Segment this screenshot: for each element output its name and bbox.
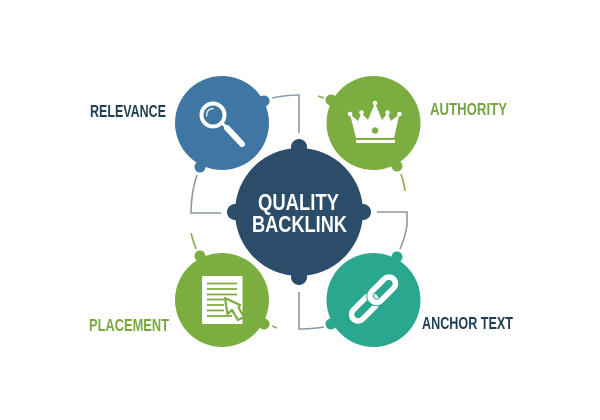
label: relevance: RELEVANCE [90, 101, 166, 121]
center title [252, 189, 347, 237]
label: anchor text: ANCHOR TEXT [422, 313, 513, 333]
node: anchor text [326, 252, 420, 347]
icon: chain link [349, 274, 398, 324]
label: authority: AUTHORITY [430, 99, 507, 119]
node: relevance [175, 76, 270, 172]
center title: QUALITY [258, 189, 339, 215]
center title: BACKLINK [252, 211, 347, 237]
node: authority [326, 76, 420, 172]
label: placement: PLACEMENT [89, 315, 169, 335]
center hub [227, 139, 371, 285]
icon: crown [348, 101, 402, 143]
node: placement [175, 250, 270, 347]
icon: document with cursor [202, 276, 244, 324]
icon: magnifying glass [202, 104, 242, 144]
